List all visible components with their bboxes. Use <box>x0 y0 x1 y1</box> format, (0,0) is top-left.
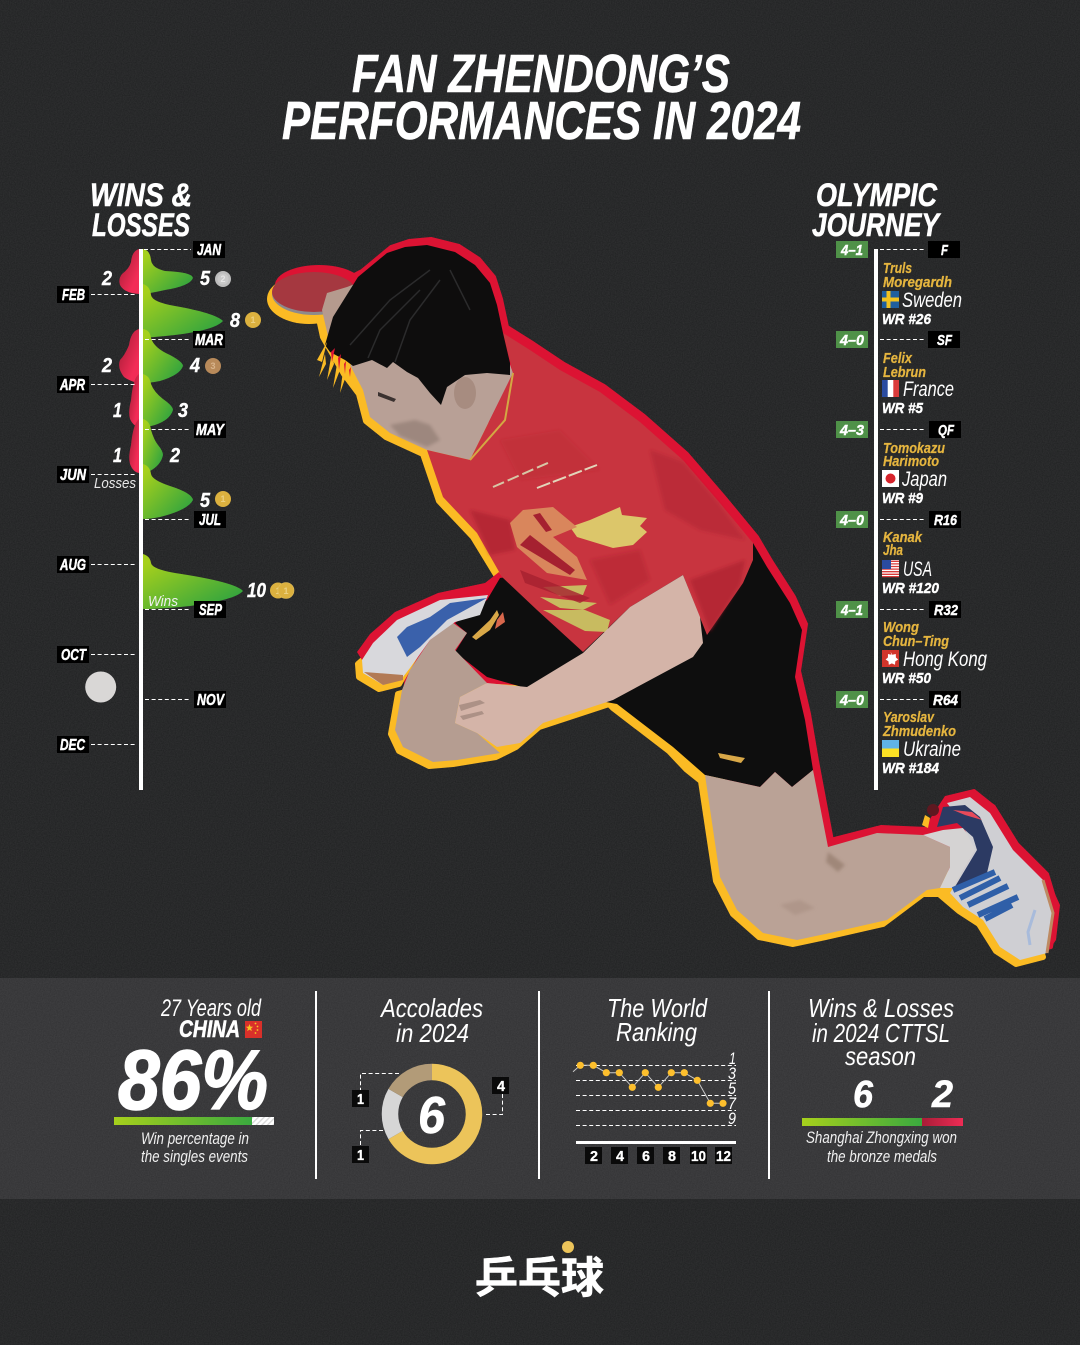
match: final: Sweden <box>902 289 962 312</box>
win percentage bar <box>114 1117 274 1125</box>
match: round of 16: R16 <box>934 512 958 529</box>
match: round of 16: Kanak <box>883 529 923 546</box>
match: semi-final: France <box>903 378 954 401</box>
accolade counts <box>352 1077 509 1164</box>
panel: profile and win percentage: 27 Years old <box>160 995 261 1022</box>
month labels <box>57 241 226 754</box>
panel: CTTSL wins and losses: in 2024 CTTSL <box>812 1018 950 1048</box>
near thigh and knee <box>395 623 500 762</box>
match: semi-final: Lebrun <box>883 364 926 381</box>
match: round of 16: 4–0 <box>839 512 865 529</box>
match: final: F <box>941 242 949 259</box>
match: round of 64 <box>836 691 961 777</box>
month labels: APR <box>59 377 85 394</box>
medals: 2 <box>220 274 226 284</box>
chart: wins and losses heading: LOSSES <box>92 207 190 243</box>
match: round of 32: Chun–Ting <box>883 633 949 650</box>
shorts <box>455 543 813 787</box>
month labels: SEP <box>199 602 222 619</box>
series labels: Losses <box>94 475 136 492</box>
match: round of 32 <box>836 601 987 687</box>
panel: accolades donut: 6 <box>418 1087 446 1145</box>
match: round of 64: WR #184 <box>882 760 940 777</box>
panel: CTTSL wins and losses: season <box>845 1041 916 1071</box>
ranking axis labels: 7 <box>728 1094 736 1113</box>
axis <box>139 249 143 790</box>
match: final: WR #26 <box>882 311 932 328</box>
hair spikes <box>317 342 351 393</box>
panel: profile and win percentage: the singles events <box>141 1148 248 1166</box>
medals: 3 <box>210 361 216 371</box>
month labels: FEB <box>62 287 85 304</box>
ranking axis labels: 5 <box>728 1079 736 1098</box>
match: quarter-final: Japan <box>901 468 947 491</box>
month dashes <box>91 250 191 744</box>
series labels: Wins <box>148 593 178 610</box>
ranking points <box>577 1062 727 1107</box>
match: round of 16 <box>836 511 961 597</box>
match: quarter-final: 4–3 <box>839 422 865 439</box>
panel: accolades donut <box>352 993 509 1164</box>
match: quarter-final: WR #9 <box>882 490 924 507</box>
match: final: 4–1 <box>840 242 863 259</box>
match: round of 32: Wong <box>883 619 919 636</box>
win and loss counts: 2 <box>169 445 180 467</box>
match: round of 32: WR #50 <box>882 670 932 687</box>
ranking axis labels: 9 <box>728 1109 736 1128</box>
donut chart <box>390 1072 474 1156</box>
match: round of 64: Ukraine <box>903 738 961 761</box>
player photo cut-out with red and yellow outline <box>267 239 1060 964</box>
win and loss counts: 2 <box>101 268 112 290</box>
match: quarter-final: Harimoto <box>883 453 939 470</box>
medals: 1 <box>275 586 281 596</box>
month axis labels: 2 <box>590 1148 598 1165</box>
hand behind head <box>322 282 360 345</box>
title <box>282 44 801 151</box>
win and loss counts <box>101 268 266 602</box>
month axis labels: 4 <box>616 1148 625 1165</box>
match: round of 32: 4–1 <box>840 602 863 619</box>
medals <box>205 271 294 598</box>
match: quarter-final: QF <box>938 422 955 439</box>
win and loss counts: 5 <box>200 268 211 290</box>
panel: accolades donut: in 2024 <box>396 1018 469 1048</box>
chart: wins and losses heading <box>90 177 192 243</box>
panel: accolades donut: Accolades <box>379 993 483 1023</box>
ranking axis labels: 1 <box>729 1049 736 1068</box>
month labels: JUN <box>60 467 86 484</box>
chart: wins and losses heading: WINS & <box>90 177 192 213</box>
olympic journey heading: JOURNEY <box>812 207 941 243</box>
match: round of 32: Hong Kong <box>903 648 987 671</box>
win and loss counts: 10 <box>247 580 266 602</box>
accolade counts: 4 <box>497 1078 506 1095</box>
month labels: JAN <box>197 242 221 259</box>
win and loss counts: 3 <box>178 400 188 422</box>
panel: world ranking line chart <box>573 993 736 1165</box>
ranking line <box>573 1065 723 1103</box>
accolade counts: 1 <box>357 1147 364 1164</box>
month axis labels: 12 <box>716 1148 731 1165</box>
wins and losses bar <box>802 1118 963 1126</box>
panel: CTTSL wins and losses: Wins & Losses <box>808 993 954 1023</box>
shirt <box>427 333 753 652</box>
month axis labels <box>585 1147 732 1165</box>
rear leg <box>705 770 950 940</box>
win and loss counts: 1 <box>113 445 122 467</box>
match: final <box>836 241 962 328</box>
panel: olympic journey <box>812 177 987 790</box>
match: semi-final <box>836 331 960 417</box>
medals: 1 <box>220 494 226 504</box>
panel: CTTSL wins and losses: the bronze medals <box>827 1148 937 1166</box>
match: round of 64: Yaroslav <box>883 709 935 726</box>
match: semi-final: 4–0 <box>839 332 865 349</box>
match: round of 64: R64 <box>933 692 959 709</box>
month labels: OCT <box>61 647 87 664</box>
match: quarter-final: Tomokazu <box>883 440 945 457</box>
month labels: MAR <box>195 332 223 349</box>
month labels: NOV <box>197 692 225 709</box>
match: semi-final: WR #5 <box>882 400 924 417</box>
panel: CTTSL wins and losses: Shanghai Zhongxing won <box>806 1129 957 1147</box>
match: semi-final: SF <box>937 332 953 349</box>
panel: world ranking line chart: Ranking <box>616 1017 697 1047</box>
month labels: JUL <box>199 512 221 529</box>
match: round of 16: USA <box>903 558 932 581</box>
month axis labels: 6 <box>642 1148 650 1165</box>
match: round of 64: 4–0 <box>839 692 865 709</box>
match: semi-final: Felix <box>883 350 913 367</box>
icon: china flag <box>245 1021 262 1038</box>
medals: 1 <box>283 586 289 596</box>
panel: CTTSL wins and losses <box>802 993 963 1166</box>
month labels: AUG <box>59 557 86 574</box>
month labels: MAY <box>196 422 225 439</box>
ranking axis labels: 3 <box>728 1064 736 1083</box>
forearm and hand <box>455 575 703 747</box>
chart: monthly wins and losses <box>57 241 294 790</box>
match: final: Moregardh <box>883 274 952 291</box>
olympic journey heading <box>812 177 941 243</box>
panel: world ranking line chart: The World <box>607 993 708 1023</box>
hair <box>325 245 510 405</box>
olympic journey heading: OLYMPIC <box>816 177 938 213</box>
ranking axis labels <box>728 1049 736 1128</box>
medals: 1 <box>250 315 256 325</box>
wins curves <box>143 249 243 609</box>
win and loss counts: 2 <box>101 355 112 377</box>
losses curves <box>119 249 139 473</box>
match: quarter-final <box>836 421 961 507</box>
month axis labels: 10 <box>691 1148 706 1165</box>
win and loss counts: 5 <box>200 490 211 512</box>
win and loss counts: 8 <box>230 310 241 332</box>
match: round of 64: Zhmudenko <box>882 723 956 740</box>
rear sock <box>923 828 977 888</box>
panel: profile and win percentage <box>114 995 274 1166</box>
match: round of 16: Jha <box>883 542 903 559</box>
ear <box>454 377 476 409</box>
match: round of 32: R32 <box>934 602 959 619</box>
series labels <box>94 475 178 610</box>
win and loss counts: 1 <box>113 400 122 422</box>
near shoe <box>362 595 488 685</box>
panel: profile and win percentage: 86% <box>118 1033 268 1127</box>
match: round of 16: WR #120 <box>882 580 940 597</box>
face and neck <box>350 340 513 460</box>
panel: CTTSL wins and losses: 2 <box>931 1074 953 1116</box>
win and loss counts: 4 <box>189 355 200 377</box>
panel: profile and win percentage: CHINA <box>179 1016 240 1043</box>
icon: table tennis ball <box>85 672 116 702</box>
month labels: DEC <box>60 737 85 754</box>
panel: CTTSL wins and losses: 6 <box>853 1074 874 1116</box>
title: PERFORMANCES IN 2024 <box>282 91 801 151</box>
paddle <box>272 272 356 315</box>
rear shoe <box>922 797 1053 960</box>
logo: 乒乓球 <box>475 1244 604 1306</box>
panel: profile and win percentage: Win percentage in <box>141 1130 249 1148</box>
match: final: Truls <box>883 260 912 277</box>
accolade counts: 1 <box>357 1091 364 1108</box>
title: FAN ZHENDONG’S <box>352 44 730 104</box>
month axis labels: 8 <box>668 1148 676 1165</box>
